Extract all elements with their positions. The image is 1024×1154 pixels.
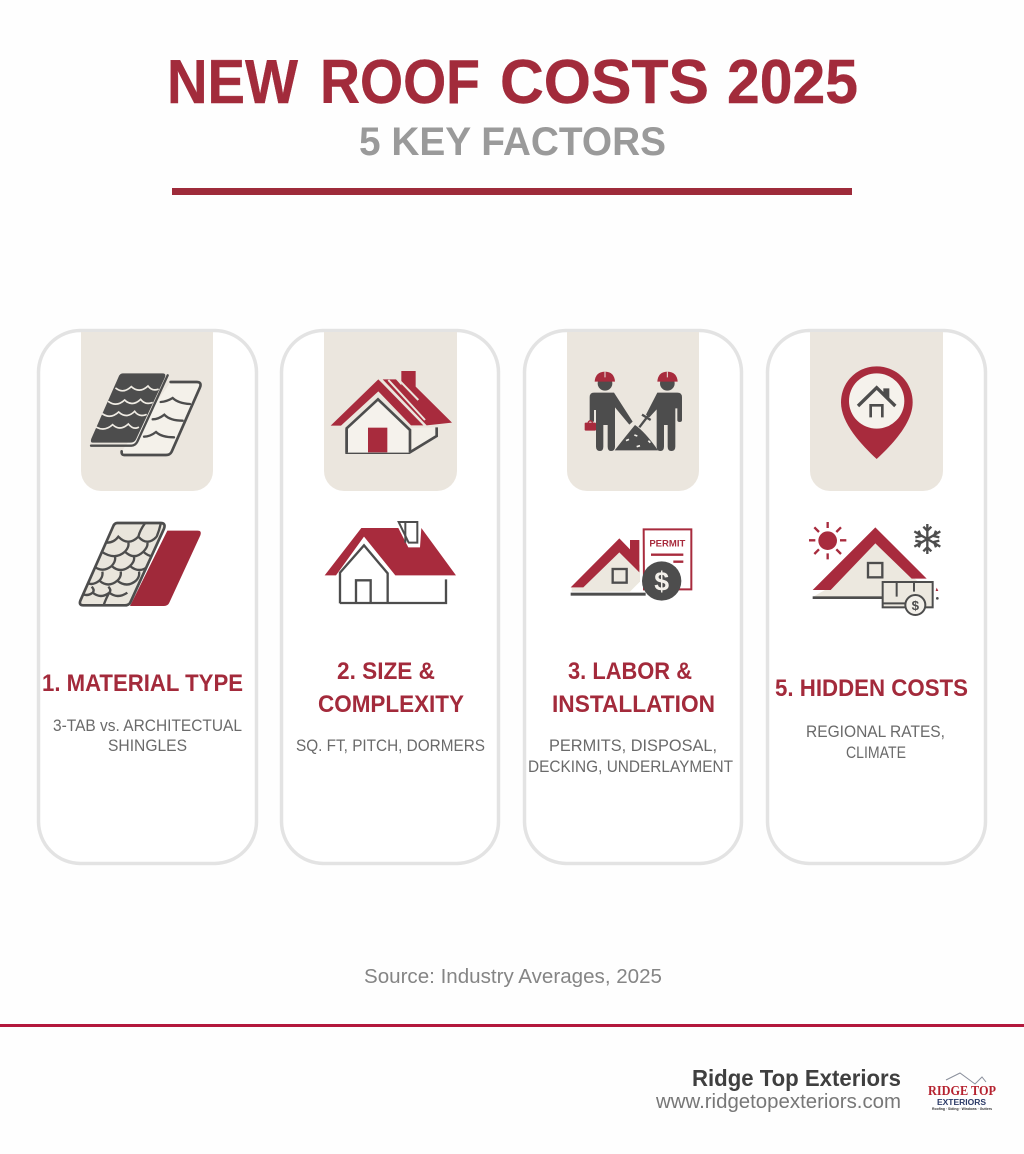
text: hidden costs details: CLIMATE [846, 744, 906, 762]
heading: labor and installation: 3. LABOR & [568, 658, 692, 685]
icon: shingle and underlayment [80, 523, 201, 606]
title rule [172, 188, 852, 195]
panel: hidden costs [768, 330, 986, 864]
logo: EXTERIORS [937, 1098, 987, 1107]
footer rule [0, 1024, 1024, 1027]
text: material details: SHINGLES [108, 737, 187, 755]
icon: shingle samples [91, 373, 201, 455]
text: material details [53, 717, 242, 755]
heading: size and complexity: 2. SIZE & [337, 658, 435, 685]
logo: RIDGE TOP [928, 1084, 996, 1099]
logo: Roofing · Siding · Windows · Gutters [932, 1107, 992, 1111]
source note: Source: Industry Averages, 2025 [364, 966, 662, 988]
tab: material icon background [81, 332, 213, 491]
title: ROOF [320, 48, 480, 117]
text: labor details: DECKING, UNDERLAYMENT [528, 758, 733, 776]
title [167, 48, 858, 117]
label: small dollar sign: $ [912, 598, 920, 613]
tab: size icon background [324, 332, 457, 491]
title: COSTS [500, 48, 709, 117]
icon: two workers with debris pile [585, 372, 682, 451]
logo [928, 1073, 996, 1111]
icon: location pin with house [841, 366, 913, 459]
tab: labor icon background [567, 332, 699, 491]
panel: material type [38, 330, 256, 864]
panel: labor and installation [524, 330, 742, 864]
label: dollar sign: $ [654, 567, 669, 597]
heading: hidden costs: 5. HIDDEN COSTS [775, 675, 968, 702]
heading: labor and installation [552, 658, 715, 718]
heading: material type: 1. MATERIAL TYPE [42, 670, 243, 697]
title: NEW [167, 48, 298, 117]
footer company name: Ridge Top Exteriors [692, 1065, 901, 1091]
subtitle: 5 KEY FACTORS [359, 120, 666, 164]
text: labor details [528, 737, 733, 776]
text: hidden costs details [806, 723, 945, 762]
panel: size and complexity [282, 330, 498, 864]
label: permit: PERMIT [649, 538, 686, 548]
icon: house with chimney [325, 522, 456, 603]
icon: house with steep roof [331, 371, 452, 453]
text: labor details: PERMITS, DISPOSAL, [549, 737, 717, 755]
heading: labor and installation: INSTALLATION [552, 691, 715, 718]
tab: hidden costs icon background [810, 332, 943, 491]
text: size details: SQ. FT, PITCH, DORMERS [296, 737, 485, 755]
footer website: www.ridgetopexteriors.com [655, 1091, 901, 1113]
title: 2025 [727, 48, 858, 117]
heading: size and complexity: COMPLEXITY [318, 691, 464, 718]
text: material details: 3-TAB vs. ARCHITECTUAL [53, 717, 242, 735]
icon: house with sun, snowflake and cash [809, 522, 940, 615]
icon: house with permit and dollar coin [571, 529, 691, 601]
text: hidden costs details: REGIONAL RATES, [806, 723, 945, 741]
heading: size and complexity [318, 658, 464, 718]
